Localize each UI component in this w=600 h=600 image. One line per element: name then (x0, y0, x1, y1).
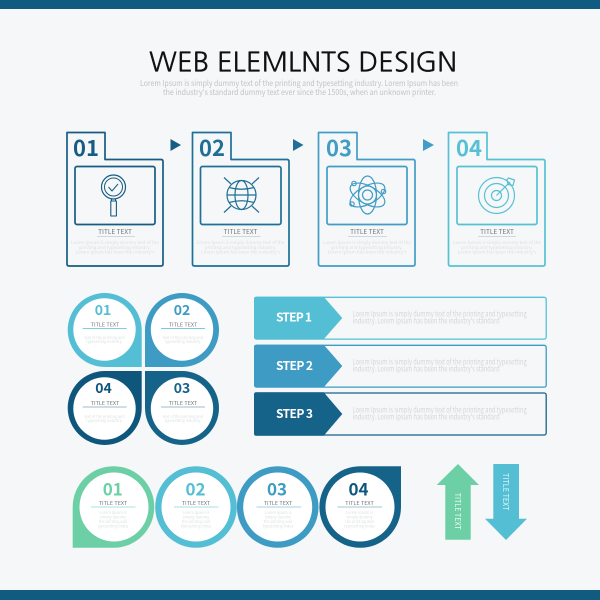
arrow: up: TITLE TEXT (452, 493, 463, 530)
panel: quad drop 02: 02 (174, 300, 190, 320)
panel: quad drop 04: TITLE TEXT (91, 399, 120, 407)
panel: step 2: STEP 2 (276, 357, 313, 374)
panel: circle 03: TITLE TEXT (264, 499, 293, 507)
panel: quad drop 03: TITLE TEXT (169, 399, 198, 407)
panel: step 3: industry. Lorem Ipsum has been the industry's standard (353, 412, 500, 422)
panel: step 2: industry. Lorem Ipsum has been the industry's standard (353, 364, 500, 374)
subtitle: the industry's standard dummy text ever since the 1500s, when an unknown printer. (163, 87, 436, 98)
panel: circle 01: typesetting indus (98, 524, 129, 530)
arrow 1 (170, 139, 181, 151)
bottom bar (0, 590, 600, 600)
card body text: Lorem Ipsum has been the industry's (328, 248, 406, 256)
panel: circle 02: simply dummy (183, 514, 209, 520)
panel: card 03 (318, 131, 415, 266)
panel: step 3: STEP 3 (276, 405, 313, 422)
panel: quad drop 03 (145, 371, 219, 445)
panel: circle 03: simply dummy (265, 514, 291, 520)
card body text: printing and typesetting industry. (461, 244, 533, 251)
panel: step 1: industry. Lorem Ipsum has been the industry's standard (353, 316, 500, 326)
card title: TITLE TEXT (480, 226, 514, 236)
panel: circle 01: 01 (103, 476, 123, 501)
arrow: up (437, 464, 479, 540)
panel: quad drop 03: 03 (174, 378, 190, 398)
icon: target (478, 178, 514, 214)
card title: TITLE TEXT (224, 226, 257, 236)
panel: quad drop 02: text of the printing and (163, 335, 203, 341)
panel: quad drop 01: 01 (95, 300, 111, 320)
card body text: Lorem Ipsum is simply dummy text of the (197, 239, 285, 246)
card body text (71, 239, 159, 256)
panel: circle 04: the printing and (345, 519, 374, 525)
panel: step 2: Lorem Ipsum is simply dummy text of the printing and typesetting (353, 356, 527, 368)
card body text: printing and typesetting industry. (331, 244, 403, 251)
card body text (197, 239, 285, 256)
panel: circle 02: the printing and (182, 519, 210, 525)
card body text: printing and typesetting industry. (205, 244, 276, 251)
number 02: 02 (199, 131, 225, 163)
panel: quad drop 02: TITLE TEXT (169, 321, 198, 329)
subtitle: Lorem Ipsum is simply dummy text of the printing and typesetting industry. Lorem Ipsum has been (140, 78, 458, 89)
panel: circle 03: the printing and (264, 519, 292, 525)
panel: quad drop 02 (145, 293, 219, 367)
panel: step 1 (254, 297, 546, 339)
number 01: 01 (73, 131, 99, 163)
panel: card 04 (448, 131, 545, 266)
panel: step 3 (254, 392, 546, 436)
top bar (0, 0, 600, 9)
subtitle (140, 78, 458, 98)
panel: circle 03: Lorem Ipsum is (265, 510, 292, 516)
card body text: Lorem Ipsum is simply dummy text of the (71, 239, 159, 246)
panel: circle 04: TITLE TEXT (345, 499, 374, 507)
arrow 2 (293, 139, 304, 151)
panel: circle 02: TITLE TEXT (182, 499, 211, 507)
panel: quad drop 03: text of the printing and (163, 414, 203, 420)
card title: TITLE TEXT (350, 226, 384, 236)
card body text: Lorem Ipsum has been the industry's (458, 248, 536, 256)
number 03: 03 (326, 131, 352, 163)
panel: quad drop 04 (68, 371, 142, 445)
card body text: Lorem Ipsum is simply dummy text of the (453, 239, 541, 246)
icon: magnifier with check (102, 175, 126, 216)
panel: circle 04: simply dummy (346, 514, 373, 520)
panel: circle 01: TITLE TEXT (99, 499, 128, 507)
panel: quad drop 01 (68, 293, 142, 367)
panel: circle 01 (73, 466, 154, 548)
card title: TITLE TEXT (98, 226, 132, 236)
panel: circle 01: Lorem Ipsum is (100, 510, 127, 516)
panel: card 02 (192, 131, 289, 266)
panel: circle 02: typesetting indus (181, 524, 212, 530)
panel: circle 03: 03 (267, 476, 287, 501)
panel: circle 04: Lorem Ipsum is (346, 510, 373, 516)
card body text: Lorem Ipsum has been the industry's (201, 248, 280, 256)
panel: circle 04: 04 (348, 476, 369, 501)
panel: circle 03 (237, 466, 318, 548)
title: WEB ELEMLNTS DESIGN (149, 48, 457, 76)
panel: quad drop 01: text of the printing and (84, 335, 125, 341)
panel: quad drop 01: typesetting industry. (86, 339, 123, 345)
panel: circle 01: simply dummy (100, 514, 126, 520)
card body text: Lorem Ipsum is simply dummy text of the (323, 239, 411, 246)
card body text (453, 239, 541, 256)
panel: circle 04: typesetting indus (344, 524, 375, 530)
panel: quad drop 04: text of the printing and (84, 414, 125, 420)
panel: circle 01: the printing and (99, 519, 127, 525)
card body text: Lorem Ipsum has been the industry's (76, 248, 154, 256)
panel: circle 02: 02 (185, 476, 206, 501)
icon: globe (224, 178, 259, 212)
panel: step 1: Lorem Ipsum is simply dummy text of the printing and typesetting (353, 308, 527, 320)
panel: circle 02 (155, 466, 237, 548)
panel: quad drop 01: TITLE TEXT (91, 321, 120, 329)
panel: quad drop 04: typesetting industry. (86, 418, 123, 424)
panel: quad drop 03: typesetting industry. (165, 418, 201, 424)
panel: card 01 (67, 131, 163, 266)
panel: circle 02: Lorem Ipsum is (183, 510, 210, 516)
panel: quad drop 04: 04 (95, 378, 112, 398)
panel: circle 04 (319, 466, 401, 548)
arrow: down (485, 464, 527, 540)
panel: step 2 (254, 345, 546, 387)
panel: quad drop 02: typesetting industry. (165, 339, 201, 345)
icon: atom (346, 176, 389, 214)
card body text (323, 239, 411, 256)
panel: step 3: Lorem Ipsum is simply dummy text of the printing and typesetting (353, 404, 527, 416)
arrow 3 (423, 139, 434, 151)
panel: circle 03: typesetting indus (263, 524, 294, 530)
number 04: 04 (456, 131, 482, 163)
arrow: down: TITLE TEXT (500, 473, 511, 511)
card body text: printing and typesetting industry. (79, 244, 151, 251)
panel: step 1: STEP 1 (276, 309, 312, 326)
